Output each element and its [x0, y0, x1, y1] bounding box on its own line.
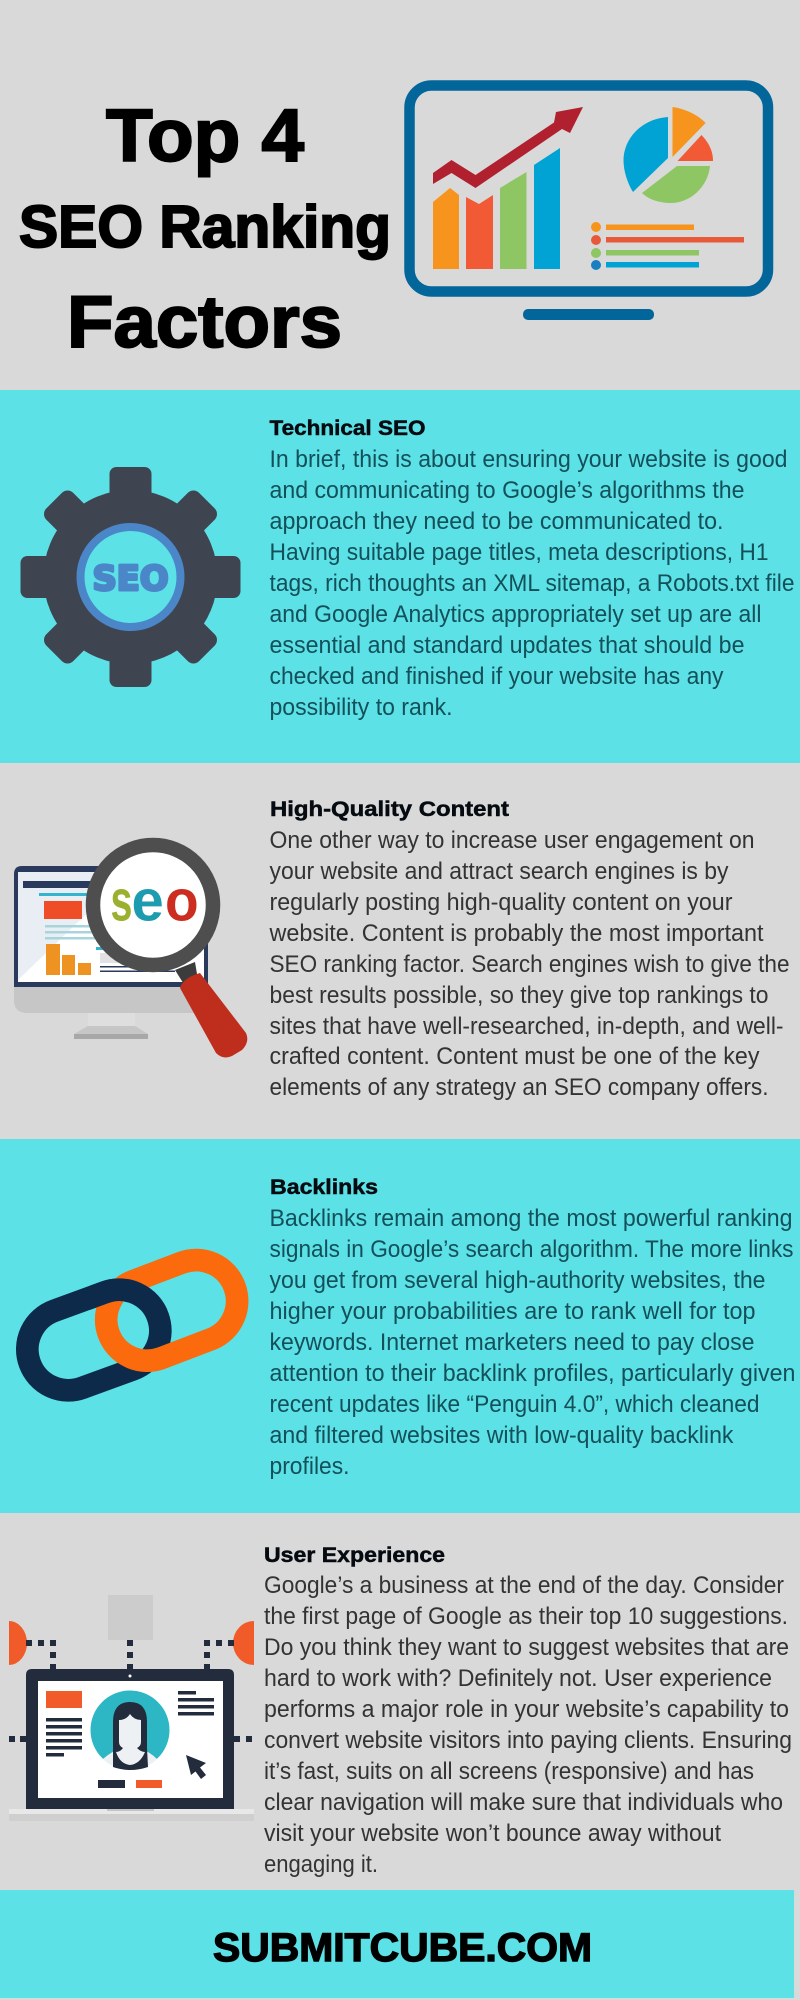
text block: high-quality content: regularly posting high-quality content on your: [270, 889, 733, 916]
text block: backlinks: you get from several high-authority websites, the: [270, 1267, 766, 1294]
text block: user experience: Google’s a business at the end of the day. Consider: [264, 1572, 784, 1599]
text block: high-quality content: your website and attract search engines is by: [270, 858, 728, 885]
text block: technical SEO: approach they need to be communicated to.: [270, 508, 724, 535]
text block: user experience: engaging it.: [264, 1851, 378, 1878]
text block: backlinks: Backlinks remain among the most powerful ranking: [270, 1205, 792, 1232]
text block: technical SEO: and communicating to Google’s algorithms the: [270, 477, 744, 504]
text block: user experience: clear navigation will make sure that individuals who: [264, 1789, 783, 1816]
text block: technical SEO: Having suitable page titles, meta descriptions, H1: [270, 539, 768, 566]
panel: backlinks: [0, 1139, 800, 1513]
title: Factors: [67, 282, 342, 363]
title: SEO Ranking: [19, 194, 391, 260]
icon: SEO gear: [20, 467, 240, 687]
title: Top 4: [106, 94, 304, 177]
text block: high-quality content: elements of any strategy an SEO company offers.: [270, 1074, 768, 1101]
text block: backlinks: higher your probabilities are to rank well for top: [270, 1298, 756, 1325]
text block: technical SEO: [270, 446, 794, 721]
text block: backlinks: and filtered websites with low-quality backlink: [270, 1422, 734, 1449]
text block: technical SEO: essential and standard updates that should be: [270, 632, 744, 659]
panel: footer: [0, 1890, 794, 1998]
text block: user experience: it’s fast, suits on all screens (responsive) and has: [264, 1758, 754, 1785]
icon: magnifier over monitor: o: [165, 868, 199, 933]
icon: chain links: [27, 1260, 237, 1390]
text block: backlinks: [270, 1205, 796, 1480]
text block: high-quality content: website. Content is probably the most important: [269, 920, 764, 947]
title: [19, 94, 391, 363]
text block: high-quality content: crafted content. Content must be one of the key: [270, 1043, 760, 1070]
text block: user experience: [264, 1572, 792, 1878]
text block: technical SEO: checked and finished if your website has any: [270, 663, 724, 690]
text block: high-quality content: One other way to increase user engagement on: [270, 827, 754, 854]
text block: user experience: hard to work with? Definitely not. User experience: [264, 1665, 772, 1692]
footer brand text: SUBMITCUBE.COM: [213, 1926, 592, 1970]
text block: high-quality content: [269, 827, 789, 1101]
icon: laptop with user profile: [9, 1595, 254, 1821]
text block: technical SEO: possibility to rank.: [270, 694, 452, 721]
panel: high-quality content: [14, 797, 790, 1101]
icon: SEO gear: SEO: [92, 559, 168, 599]
heading: high-quality content: High-Quality Content: [270, 797, 509, 821]
panel: header: [19, 86, 768, 363]
icon: magnifier over monitor: [14, 845, 247, 1057]
panel: technical SEO: [0, 390, 800, 763]
text block: user experience: the first page of Google as their top 10 suggestions.: [264, 1603, 788, 1630]
text block: user experience: Do you think they want to suggest websites that are: [264, 1634, 789, 1661]
heading: backlinks: Backlinks: [270, 1175, 378, 1199]
text block: high-quality content: best results possible, so they give top rankings to: [270, 982, 768, 1009]
text block: technical SEO: and Google Analytics appropriately set up are all: [270, 601, 762, 628]
text block: high-quality content: sites that have well-researched, in-depth, and well-: [270, 1013, 784, 1040]
text block: user experience: visit your website won’t bounce away without: [264, 1820, 721, 1847]
text block: backlinks: attention to their backlink profiles, particularly given: [270, 1360, 796, 1387]
icon: magnifier over monitor: e: [132, 868, 164, 934]
heading: user experience: User Experience: [264, 1543, 445, 1567]
heading: technical SEO: Technical SEO: [270, 416, 426, 440]
panel: user experience: [9, 1543, 792, 1878]
text block: backlinks: profiles.: [270, 1453, 350, 1480]
text block: technical SEO: In brief, this is about ensuring your website is good: [270, 446, 788, 473]
text block: backlinks: keywords. Internet marketers need to pay close: [270, 1329, 754, 1356]
icon: analytics monitor: [410, 86, 768, 320]
text block: user experience: performs a major role in your website’s capability to: [264, 1696, 789, 1723]
icon: magnifier over monitor: s: [110, 868, 132, 933]
text block: backlinks: recent updates like “Penguin 4.0”, which cleaned: [270, 1391, 760, 1418]
